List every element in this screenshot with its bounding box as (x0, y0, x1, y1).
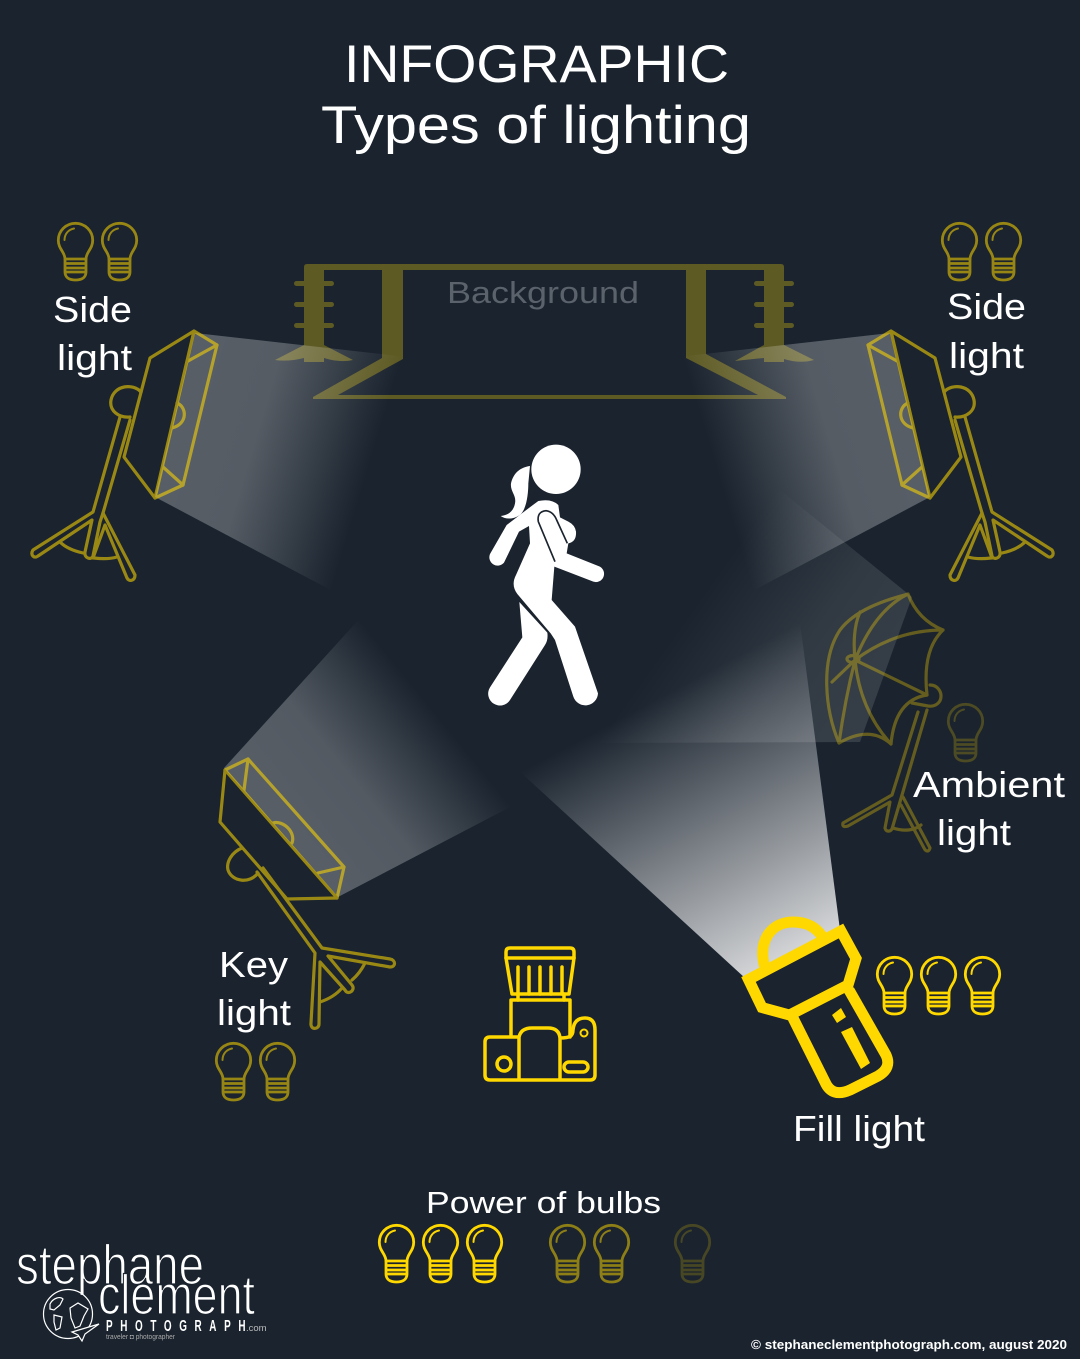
legend: power of bulbs (379, 1185, 710, 1282)
logo globe icon (44, 1290, 99, 1341)
legend: power of bulbs: Power of bulbs (426, 1185, 661, 1220)
bulbs: fill light power (877, 957, 1000, 1014)
label: key light: light (217, 992, 291, 1033)
light beam: key light (224, 616, 512, 897)
light beam: left side light (155, 333, 425, 595)
ambient light umbrella (827, 594, 943, 851)
label: right side light: Side (947, 286, 1026, 327)
copyright: © stephaneclementphotograph.com, august 2020 (751, 1338, 1067, 1352)
logo: stephane clement photograph: stephane (16, 1233, 204, 1296)
label: Background: Background (447, 275, 639, 310)
label: ambient light: light (937, 812, 1011, 853)
logo: stephane clement photograph: clement (98, 1263, 255, 1326)
logo: stephane clement photograph: .com (246, 1323, 267, 1334)
label: key light: Key (219, 944, 288, 985)
light beam: right side light (660, 333, 930, 595)
label: right side light: light (949, 335, 1024, 376)
bulb: ambient light power (948, 704, 983, 761)
label: left side light (53, 289, 132, 378)
background paper stand (275, 264, 814, 399)
camera icon (485, 948, 595, 1080)
bulbs: left side light power (58, 223, 137, 280)
person walking (488, 445, 604, 706)
label: ambient light: Ambient (913, 764, 1065, 805)
key light softbox (220, 759, 394, 1028)
flashlight icon (748, 922, 888, 1093)
light beam: ambient light (600, 490, 912, 743)
left softbox side light (32, 331, 217, 580)
logo: stephane clement photograph (16, 1233, 267, 1341)
label: ambient light (913, 764, 1065, 853)
title: Types of lighting (321, 96, 751, 155)
logo: stephane clement photograph: PHOTOGRAPH (106, 1317, 246, 1335)
label: left side light: light (57, 337, 132, 378)
bulbs: key light power (216, 1043, 295, 1100)
title (321, 35, 751, 155)
bulbs: right side light power (942, 223, 1021, 280)
light beam: fill light (518, 622, 840, 978)
label: left side light: Side (53, 289, 132, 330)
logo: stephane clement photograph: traveler ◘ photographer (106, 1334, 176, 1341)
label: fill light: Fill light (793, 1108, 925, 1149)
right softbox side light (868, 331, 1053, 580)
label: right side light (947, 286, 1026, 376)
label: key light (217, 944, 291, 1033)
title: INFOGRAPHIC (344, 35, 729, 94)
